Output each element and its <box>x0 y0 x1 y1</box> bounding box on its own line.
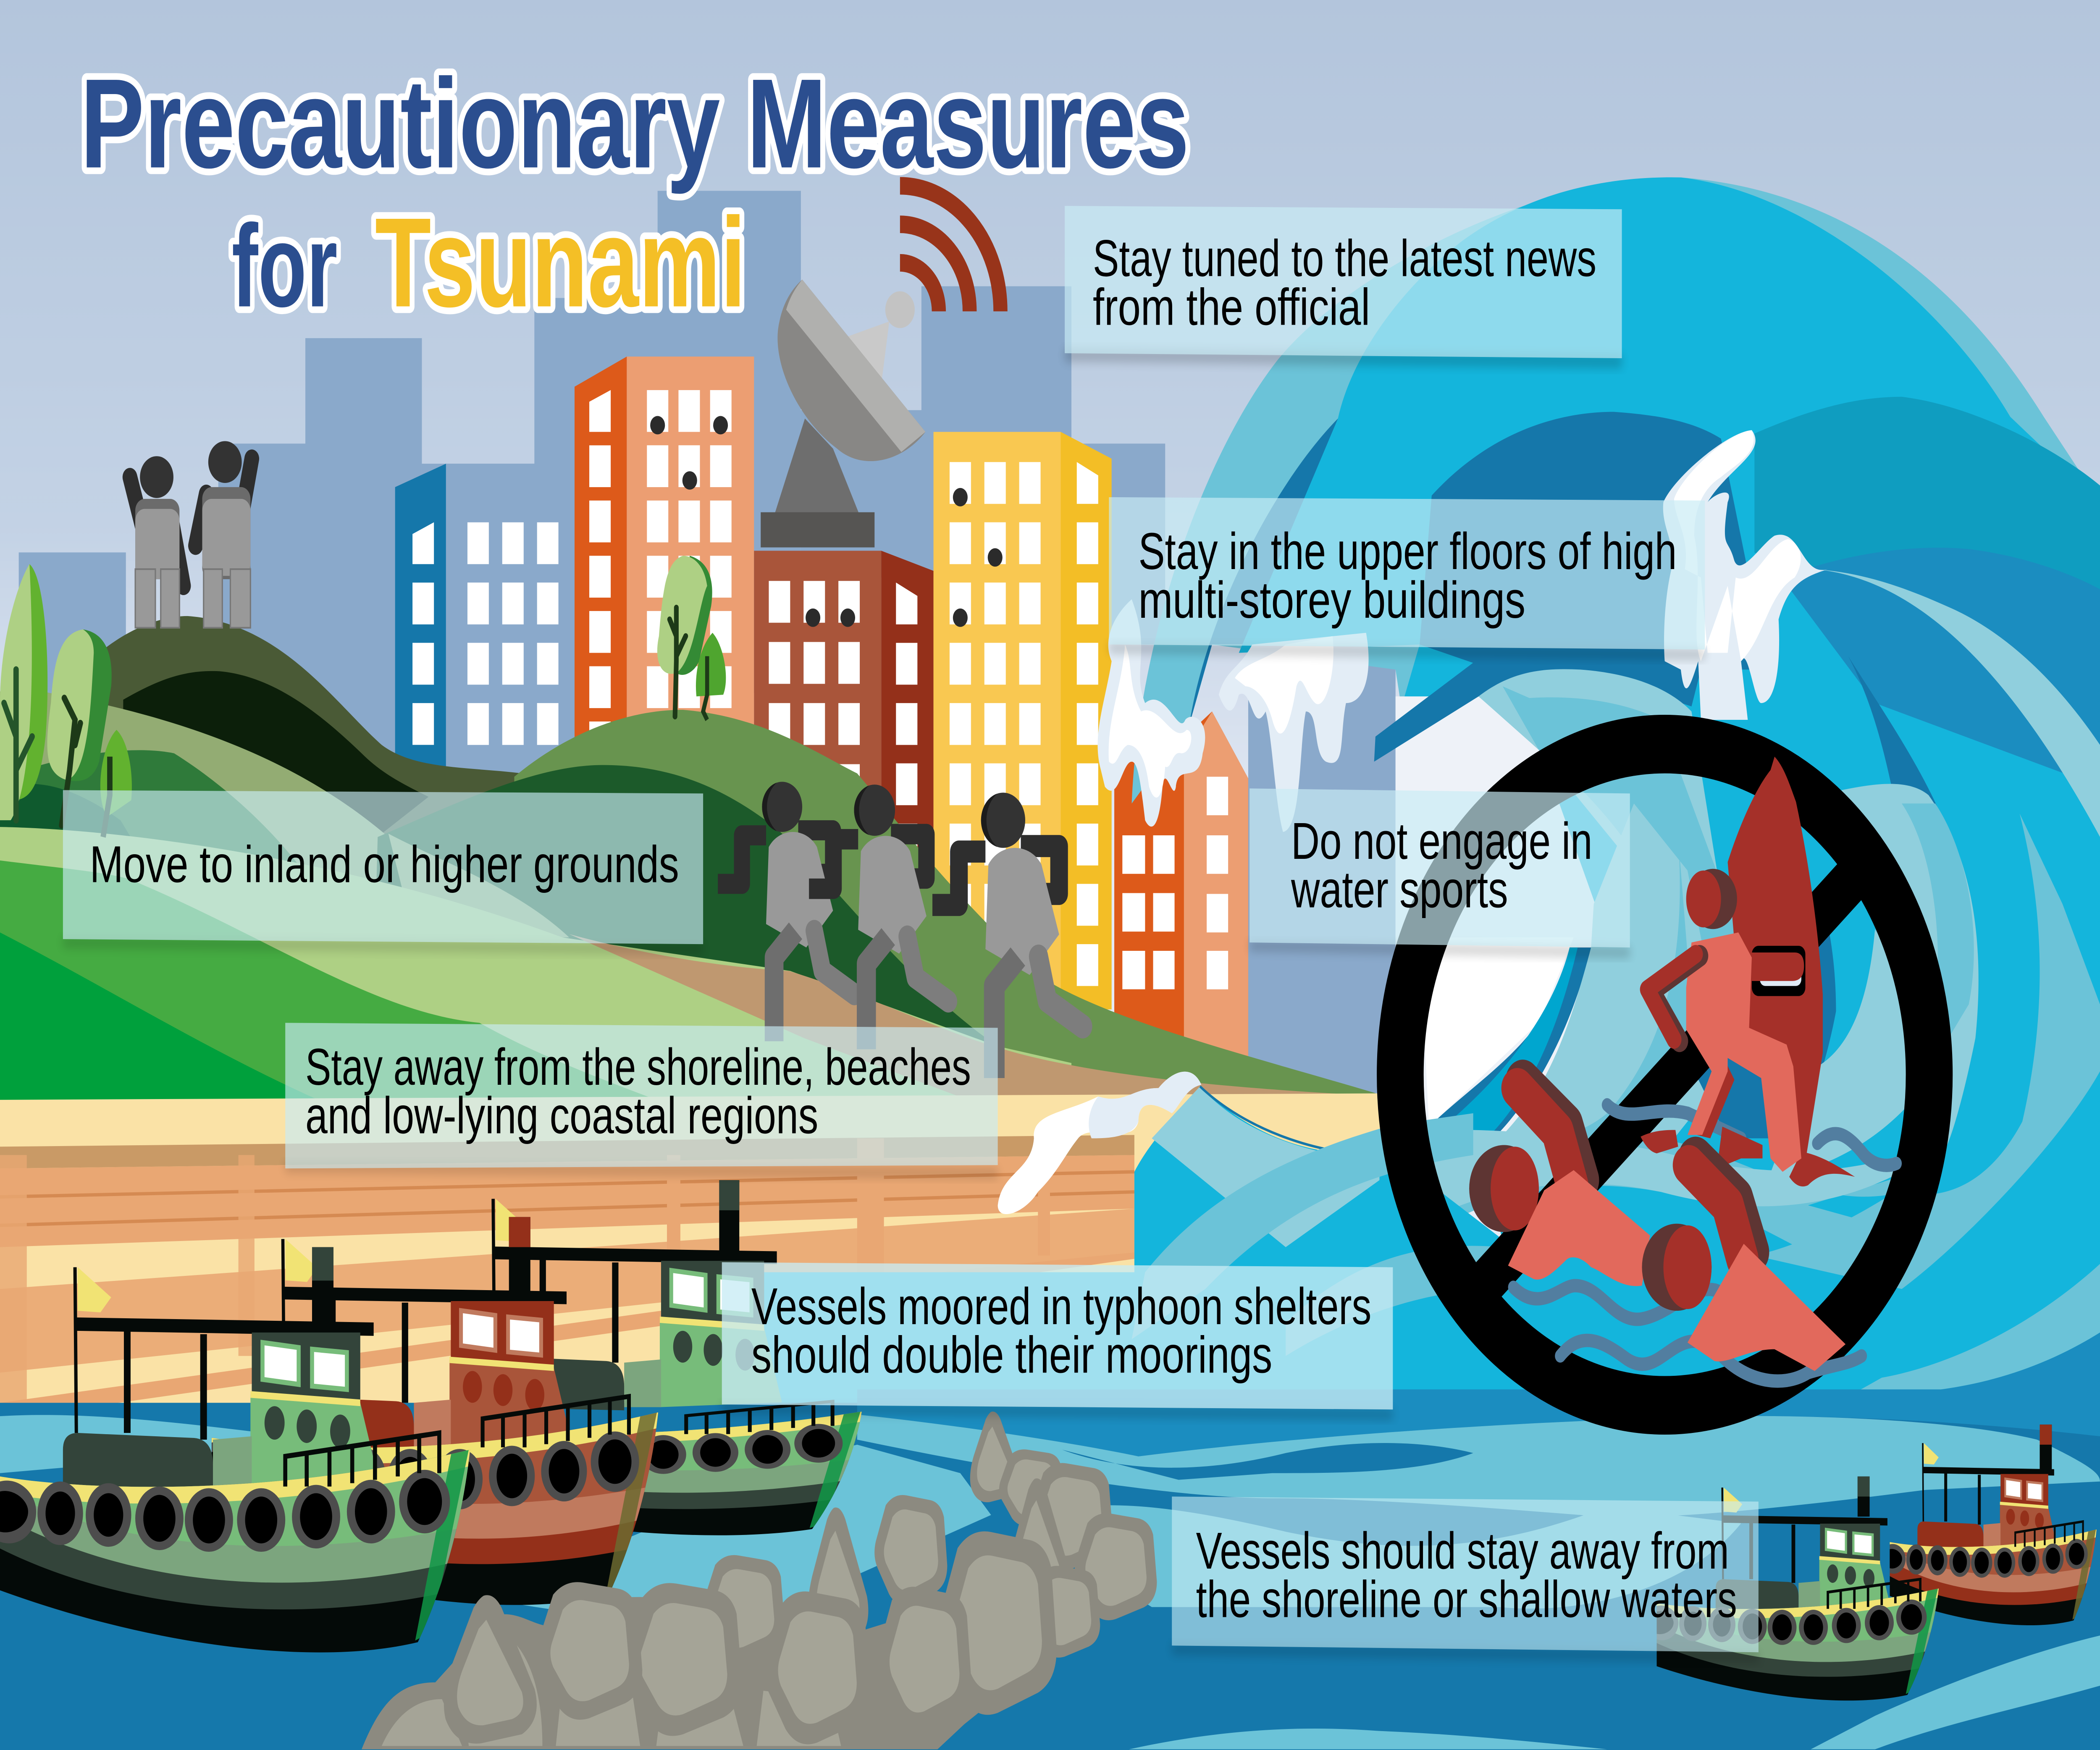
callout: stay away from shoreline <box>285 1023 998 1178</box>
sand beach <box>0 1093 1433 1272</box>
right orange building <box>1114 711 1248 1088</box>
icon: surfer on surfboard <box>1641 757 1855 1186</box>
icon: signal arcs <box>900 186 1000 311</box>
wave interior: white hollow <box>1396 696 1607 1155</box>
callout: double moorings: should double their moorings <box>751 1326 1272 1384</box>
prohibition sign: ring <box>1400 744 1929 1405</box>
wave interior: dark tip <box>1374 645 1701 762</box>
right swells outside ring <box>1842 784 1979 1155</box>
boat: front green vessel <box>0 1247 471 1674</box>
runners on the slope <box>718 782 1083 1078</box>
yellow building <box>934 432 1112 1010</box>
callout: water sports: water sports <box>1291 861 1508 918</box>
prohibition sign: diagonal bar <box>1467 854 1875 1304</box>
icon: swimmer right <box>1642 1158 1845 1371</box>
boat: small red vessel <box>1890 1425 2097 1635</box>
wooden seawall <box>0 1135 1134 1419</box>
callout: stay away from shoreline: Stay away from the shoreline, beaches <box>305 1038 971 1096</box>
callout: water sports: Do not engage in <box>1291 812 1592 870</box>
blue building <box>395 464 576 787</box>
breakwater rocks <box>362 1412 1157 1749</box>
title: for <box>232 200 338 331</box>
satellite dish <box>761 280 925 547</box>
wave interior: crest arcs <box>1478 669 1728 937</box>
small shore wave <box>723 1072 1741 1423</box>
wave interior: white below callout <box>1420 937 1574 1127</box>
callout: stay tuned <box>1065 206 1622 368</box>
callout: double moorings <box>722 1262 1393 1419</box>
boat: third green vessel <box>415 1180 863 1548</box>
sea <box>0 1389 2100 1750</box>
callout: stay tuned: from the official <box>1093 278 1370 336</box>
title: Tsunami <box>375 192 746 334</box>
callout: stay away from shoreline: and low-lying coastal regions <box>305 1086 818 1144</box>
callout: vessels stay away: the shoreline or shallow waters <box>1196 1570 1737 1628</box>
boat: red vessel <box>212 1217 659 1625</box>
callout: upper floors <box>1109 497 1705 659</box>
city skyline <box>19 191 1396 1115</box>
callout: vessels stay away: Vessels should stay away from <box>1196 1522 1729 1579</box>
title <box>80 53 1189 334</box>
water ripples <box>1513 1105 1896 1381</box>
orange building <box>575 357 754 803</box>
wave interior: inner arc <box>1503 686 1741 971</box>
boat: small green vessel <box>1657 1477 1940 1713</box>
big tsunami wave <box>1132 177 2100 1423</box>
brown building <box>754 551 934 871</box>
icon: swimmer left <box>1469 1081 1650 1286</box>
callout: vessels stay away <box>1172 1497 1759 1662</box>
callout: double moorings: Vessels moored in typhoon shelters <box>751 1277 1371 1335</box>
callout: move inland: Move to inland or higher grounds <box>90 835 679 893</box>
hills and ground <box>0 616 1393 1155</box>
callout: stay tuned: Stay tuned to the latest news <box>1093 229 1596 287</box>
callout: move inland <box>63 790 703 954</box>
people waving on hilltop <box>130 441 252 628</box>
callout: upper floors: multi-storey buildings <box>1138 571 1525 629</box>
trees <box>0 556 726 837</box>
title: Precautionary Measures <box>80 53 1189 195</box>
callout: upper floors: Stay in the upper floors of high <box>1138 522 1677 580</box>
callout: water sports <box>1250 788 1630 958</box>
foam splashes <box>1097 430 1828 832</box>
